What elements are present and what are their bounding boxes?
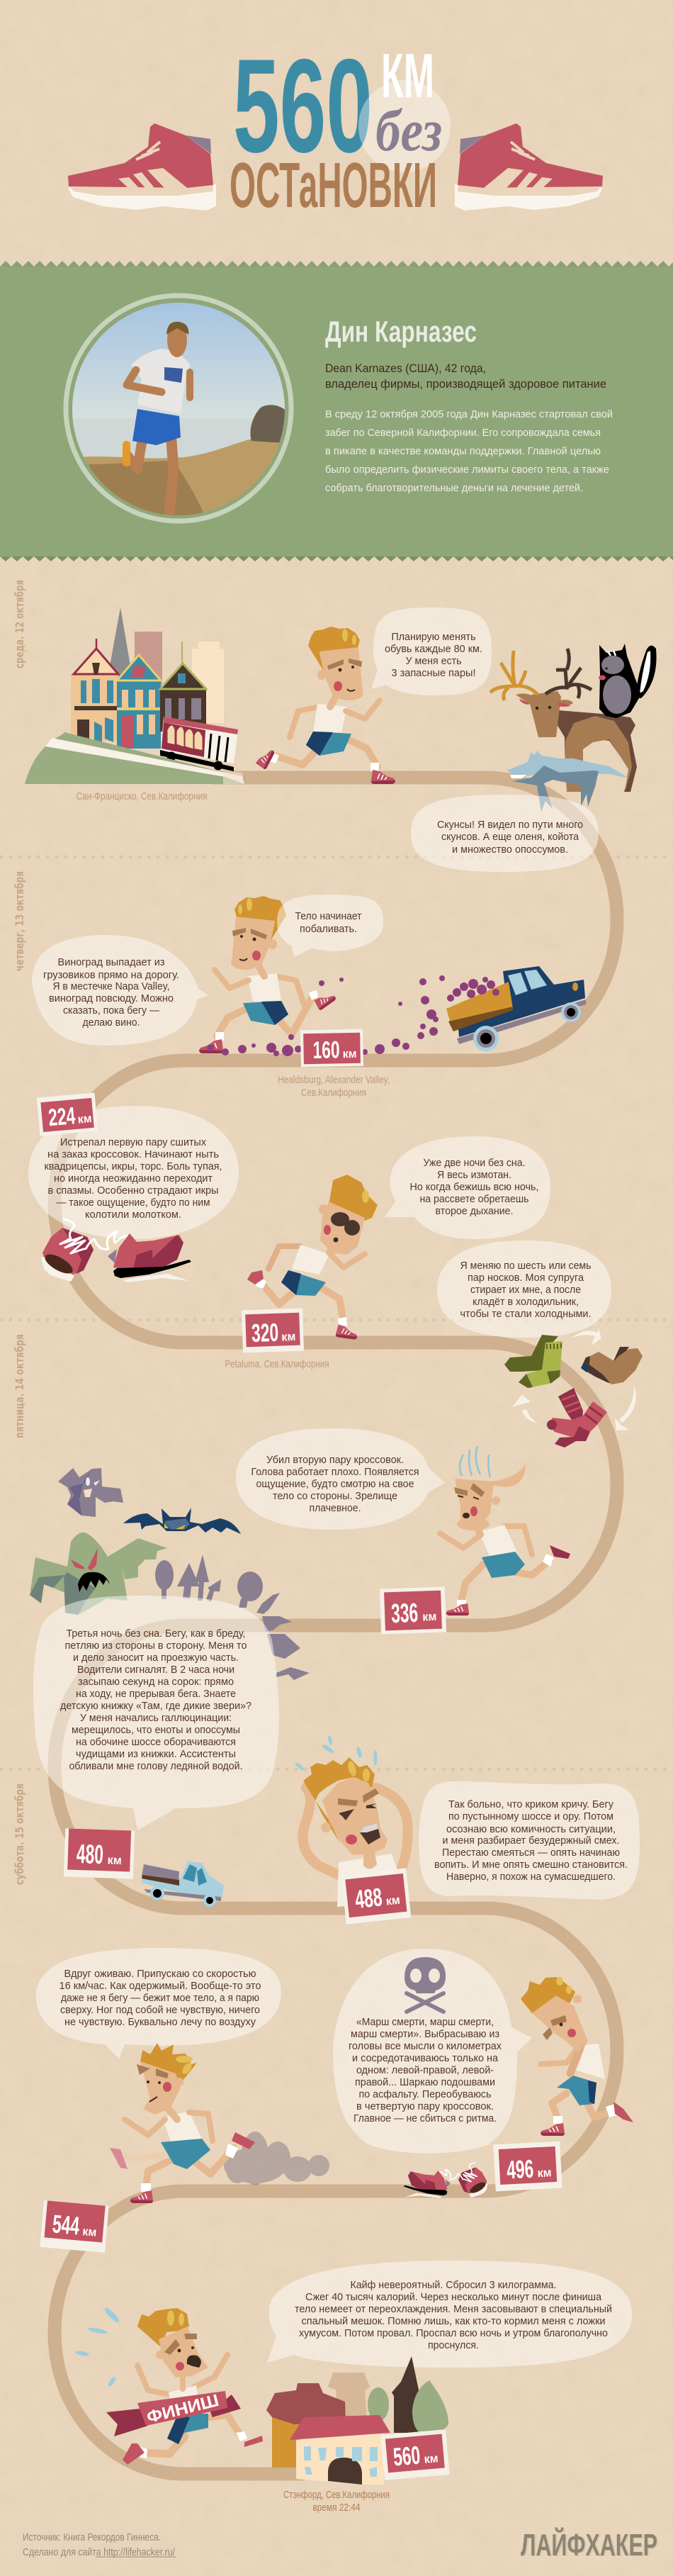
speech bubble: screaming: вопить. И мне опять смешно становится.: [434, 1859, 628, 1871]
steam: [460, 1446, 490, 1477]
portrait photo: [66, 296, 291, 521]
hill: [25, 732, 244, 784]
distance tag: 560 km: [380, 2429, 450, 2480]
illustration: San Francisco city: [25, 607, 244, 784]
distance tag: 488 km: [341, 1868, 411, 1925]
speech bubble: third night: чудищами из книжки. Ассистенты: [76, 1748, 236, 1760]
speech bubble: finish: проснулся.: [428, 2339, 479, 2351]
speech bubble: second pair: плачевное.: [309, 1502, 361, 1514]
icon: brown boot: [581, 1347, 643, 1384]
speech bubble: coming alive: [36, 1948, 281, 2059]
icon: white arrows: [512, 1329, 636, 1430]
distance tag: 160 km: 160: [312, 1036, 340, 1064]
house 2: [117, 655, 161, 749]
runner 2: [199, 896, 336, 1053]
scattered grapes: [207, 975, 445, 1056]
bio paragraph: собрать благотворительные деньги на лечение детей.: [325, 482, 583, 494]
speech bubble: coming alive: не чувствую. Буквально лечу по воздуху: [64, 2016, 256, 2028]
speech bubble: second pair: Голова работает плохо. Появляется: [251, 1466, 419, 1478]
speech bubble: skunks: Скунсы! Я видел по пути много: [437, 819, 583, 831]
speech bubble: first pair worn: в спазмы. Особенно страдают икры: [48, 1185, 218, 1197]
house 1: [71, 639, 118, 742]
speech bubble: two nights: второе дыхание.: [435, 1205, 513, 1217]
speech bubble: death march: Главное — не сбиться с ритма.: [354, 2112, 497, 2124]
dust cloud: [224, 2132, 329, 2185]
speech bubble: socks: пар носков. Моя супруга: [468, 1272, 584, 1284]
head with open scalp: [454, 1464, 526, 1530]
highlight circle: [358, 80, 451, 172]
speech bubble: coming alive: Вдруг оживаю. Припускаю со скоростью: [64, 1968, 256, 1980]
sweat drops: [294, 1735, 377, 1771]
distance tag: 488 km: км: [385, 1893, 401, 1908]
runner in photo: [123, 322, 190, 512]
speech bubble: socks: стирает их мне, а после: [470, 1284, 581, 1296]
distance tag: 496 km: км: [537, 2166, 552, 2180]
speech bubble: third night: [33, 1596, 279, 1830]
speech bubble: third night: обливали мне голову ледяной водой.: [69, 1760, 242, 1772]
date label: Friday: пятница. 14 октября: [13, 1334, 26, 1438]
speech bubble: screaming: осознаю всю комичность ситуации,: [446, 1823, 616, 1835]
speech bubble: shoes plan: 3 запасные пары!: [391, 667, 476, 679]
bio paragraph: [325, 408, 613, 494]
speech bubble: third night: детскую книжку «Там, где дикие звери»?: [60, 1700, 251, 1712]
speech bubble: screaming: Наверно, я похож на сумасшедшего.: [446, 1871, 616, 1883]
speech bubble: skunks: [411, 795, 599, 872]
distance tag: 488 km: 488: [354, 1882, 383, 1914]
speech bubble: two nights: Но когда бежишь всю ночь,: [409, 1181, 538, 1193]
icon: green ghost: [30, 1533, 167, 1615]
label: Healdsburg: Healdsburg, Alexander Valley,: [278, 1074, 390, 1086]
speech bubble: coming alive: даже не я бегу — бежит мое тело, а я парю: [61, 1992, 259, 2004]
speech bubble: socks: Я меняю по шесть или семь: [460, 1260, 592, 1272]
runner 3: [247, 1175, 378, 1340]
speech bubble: third night: мерещилось, что еноты и опоссумы: [72, 1724, 240, 1736]
speech bubble: coming alive: 16 км/час. Как одержимый. Вообще-то это: [60, 1980, 261, 1992]
house 3: [160, 642, 206, 732]
speech bubble: death march: «Марш смерти, марш смерти,: [356, 2016, 494, 2028]
speech bubble: shoes plan: У меня есть: [405, 655, 462, 667]
speech bubble: third night: Третья ночь без сна. Бегу, как в бреду,: [67, 1628, 245, 1640]
bio subtitle: владелец фирмы, производящей здоровое питание: [325, 377, 606, 391]
icon: right sneaker: [455, 123, 603, 211]
speech bubble: skunks: и множество опоссумов.: [452, 844, 568, 856]
speech bubble: finish: хумусом. Потом провал. Проспал всю ночь и утром благополучно: [299, 2327, 608, 2339]
speech bubble: socks: чтобы те стали холодными.: [460, 1308, 591, 1320]
runner 5 screaming: [294, 1735, 408, 1907]
icon: bat: [123, 1508, 241, 1534]
speech bubble: first pair worn: но иногда неожиданно переходит: [54, 1172, 213, 1185]
speech bubble: third night: на ходу, не прерывая бега. Знаете: [76, 1688, 236, 1700]
cargo grapes: [447, 977, 499, 1002]
title KM: КМ: [381, 40, 434, 111]
bio paragraph: было определить физические лимиты своего тела, а также: [325, 464, 609, 476]
bio subtitle: [325, 362, 606, 391]
speech bubble: grapes: Виноград выпадает из: [58, 956, 165, 968]
distance tag: 320 km: [242, 1309, 304, 1353]
speech bubble: death march: правой... Шаркаю подошвами: [355, 2076, 495, 2088]
distance tag: 336 km: км: [422, 1610, 437, 1624]
date label: Wednesday: среда. 12 октября: [13, 580, 26, 668]
speech bubble: third night: петляю из стороны в сторону. Меня то: [65, 1640, 247, 1652]
speech bubble: finish: [267, 2261, 632, 2368]
label: San Francisco: Сан-Франциско, Сев.Калифорния: [77, 790, 207, 802]
date separators: [1, 857, 673, 1769]
speech bubble: second pair: Убил вторую пару кроссовок.: [266, 1454, 404, 1466]
speech bubble: death march: по асфальту. Переобуваюсь: [358, 2088, 492, 2100]
speech bubble: two nights: [385, 1136, 550, 1239]
illustration: pickup: [142, 1861, 224, 1907]
speech bubble: second pair: [236, 1428, 445, 1530]
speech bubble: finish: Кайф невероятный. Сбросил 3 килограмма.: [350, 2279, 557, 2291]
speech bubble: grapes: грузовиков прямо на дорогу.: [43, 969, 179, 981]
distance tag: 160 km: [300, 1029, 363, 1067]
speech bubble: first pair worn: Истрепал первую пару сшитых: [60, 1136, 206, 1148]
speech bubble: grapes: сказать, пока бегу —: [63, 1004, 159, 1017]
distance tag: 496 km: [493, 2141, 562, 2191]
speech bubble: screaming: и меня разбирает безудержный смех.: [442, 1835, 619, 1847]
finish ribbon: [106, 2391, 241, 2436]
speech bubble: death march: марш смерти». Выбрасываю из: [351, 2028, 499, 2040]
speech bubble: death march: и сосредотачиваюсь только на: [352, 2052, 499, 2064]
distance tag: 320 km: 320: [251, 1318, 279, 1348]
speech bubble: shoes plan: обувь каждые 80 км.: [385, 643, 482, 655]
illustration: coyote: [507, 751, 629, 812]
runner 1: [255, 627, 395, 784]
speech bubble: third night: и дело заносит на проезжую часть.: [73, 1652, 239, 1664]
speech bubble: skunks: скунсов. А еще оленя, койота: [441, 831, 579, 843]
speech bubble: two nights: Уже две ночи без сна.: [424, 1157, 526, 1169]
runner 6 tired: [521, 1977, 633, 2136]
illustration: deer: [490, 649, 637, 792]
icon: forest trees: [155, 1555, 310, 1680]
bio paragraph: забег по Северной Калифорнии. Его сопровождала семья: [325, 427, 601, 439]
title stops: ОСТаНОВКИ: [230, 150, 437, 221]
illustration: truck: [446, 966, 586, 1051]
speech bubble: grapes: [32, 935, 208, 1046]
speech bubble: death march: [333, 1949, 532, 2154]
icon: red socks: [547, 1388, 607, 1447]
title number 560: 560: [233, 31, 373, 180]
speech bubble: body aches: побаливать.: [300, 923, 357, 935]
bio paragraph: в пикапе в качестве команды поддержки. Главной целью: [325, 445, 601, 457]
date label: Saturday: суббота. 15 октября: [13, 1783, 26, 1885]
speech bubble: finish: тело немеет от переохлаждения. Меня засовывают в специальный: [295, 2303, 612, 2315]
label: Healdsburg: [278, 1074, 390, 1099]
illustration: skunk: [599, 644, 657, 718]
head spiky hair: [137, 2043, 197, 2115]
speech bubble: finish: спальный мешок. Помню лишь, как кто-то кормил меня с ложки: [302, 2315, 605, 2327]
speech bubble: first pair worn: квадрицепсы, икры, торс. Боль тупая,: [44, 1160, 222, 1172]
distance tag: 560 km: км: [424, 2451, 439, 2466]
distance tag: 224 km: [37, 1093, 98, 1136]
label: Stanford: Стэнфорд, Сев.Калифорния: [283, 2489, 390, 2501]
speech bubble: screaming: [419, 1781, 640, 1900]
speech bubble: two nights: Я весь измотан.: [437, 1169, 511, 1181]
sweat drops: [75, 2306, 121, 2387]
source credits: Сделано для сайта http://lifehacker.ru/: [23, 2546, 176, 2558]
screaming head: [303, 1757, 388, 1855]
label: Petaluma: Petaluma, Сев.Калифорния: [225, 1358, 329, 1370]
speech bubble: finish: Сжег 40 тысяч калорий. Через несколько минут после финиша: [305, 2291, 602, 2303]
speech bubble: first pair worn: колотили молотком.: [85, 1209, 181, 1221]
icon: purple monster: [58, 1468, 123, 1517]
distance tag: 480 km: км: [107, 1853, 122, 1867]
distance tag: 224 km: 224: [47, 1102, 77, 1131]
distance tag: 336 km: [380, 1586, 446, 1635]
speech bubble: second pair: ощущение, будто смотрю на свое: [256, 1478, 414, 1490]
illustration: Stanford buildings: [266, 2356, 448, 2485]
distance tag: 496 km: 496: [506, 2154, 534, 2185]
speech bubble: first pair worn: на заказ кроссовок. Начинают ныть: [47, 1148, 219, 1160]
runner 4: [440, 1446, 570, 1615]
speech bubble: shoes plan: [371, 607, 492, 695]
distance tag: 544 km: [40, 2200, 109, 2253]
speech bubble: body aches: [277, 895, 383, 957]
speech bubble: third night: на обочине шоссе оборачиваются: [76, 1736, 236, 1748]
label: Healdsburg: Сев.Калифорния: [301, 1087, 366, 1099]
speech bubble: third night: засыпаю секунд на сорок: прямо: [78, 1676, 234, 1688]
speech bubble: socks: кладёт в холодильник,: [473, 1296, 579, 1308]
head bowed: [521, 1977, 588, 2052]
speech bubble: grapes: делаю вино.: [82, 1017, 140, 1029]
title: [230, 31, 451, 221]
speech bubble: screaming: по пустынному шоссе и ору. Потом: [448, 1810, 613, 1822]
icon: left sneaker: [68, 123, 216, 211]
speech bubble: grapes: виноград повсюду. Можно: [49, 992, 174, 1004]
speech bubble: death march: головы все мысли о километрах: [349, 2040, 502, 2052]
runner 7 flying: [110, 2043, 329, 2203]
panel: biography: [0, 261, 673, 562]
speech bubble: death march: в четвертую пару кроссовок.: [356, 2100, 494, 2112]
speech bubble: third night: Водители сигналят. В 2 часа ночи: [77, 1664, 234, 1676]
speech bubble: death march: одном: левой-правой, левой-: [356, 2064, 494, 2076]
bio name: Дин Карназес: [325, 315, 477, 348]
speech bubble: shoes plan: Планирую менять: [391, 631, 476, 643]
speech bubble: third night: У меня начались галлюцинации:: [80, 1712, 232, 1724]
label: Stanford: [283, 2489, 390, 2514]
bio paragraph: В среду 12 октября 2005 года Дин Карназес стартовал свой: [325, 408, 613, 420]
icon: sneakers at 496: [404, 2163, 488, 2198]
distance tag: 160 km: км: [342, 1047, 357, 1060]
distance tag: 480 km: 480: [76, 1839, 104, 1870]
icon: worn-out sneakers: [41, 1219, 191, 1282]
cable car: [160, 717, 238, 771]
distance tag: 544 km: км: [82, 2224, 97, 2239]
speech bubble: socks: [437, 1241, 611, 1338]
speech bubble: first pair worn: — такое ощущение, будто по ним: [57, 1197, 210, 1209]
distance tag: 560 km: 560: [392, 2440, 422, 2472]
title without: без: [375, 98, 442, 164]
distance tag: 320 km: км: [281, 1330, 296, 1344]
route road: [55, 778, 617, 2474]
distance tag: 480 km: [64, 1828, 135, 1879]
speech bubble: coming alive: сверху. Ног под собой не чувствую, ничего: [60, 2004, 260, 2016]
head with sunglasses: [319, 1175, 378, 1255]
speech bubble: second pair: тело со стороны. Зрелище: [273, 1490, 397, 1502]
distance tag: 224 km: км: [77, 1111, 92, 1126]
icon: skull: [405, 1957, 446, 2012]
speech bubble: grapes: Я в местечке Napa Valley,: [52, 980, 170, 992]
label: Stanford: время 22:44: [313, 2502, 360, 2514]
speech bubble: two nights: на рассвете обретаешь: [419, 1193, 529, 1205]
date label: Thursday: четверг, 13 октября: [13, 871, 26, 971]
source credits: [23, 2531, 176, 2558]
runner 8 finish: [75, 2306, 263, 2465]
speech bubble: screaming: Перестаю смеяться — опять начинаю: [442, 1847, 620, 1859]
speech bubble: first pair worn: [28, 1106, 239, 1239]
finish ribbon: ФИНИШ: [145, 2391, 221, 2427]
distance tag: 544 km: 544: [51, 2209, 81, 2241]
source credits: Источник: Книга Рекордов Гиннеса.: [23, 2531, 161, 2543]
speech bubble: screaming: Так больно, что криком кричу. Бегу: [448, 1798, 613, 1810]
head shouting: [137, 2308, 208, 2378]
speech bubble: body aches: Тело начинает: [295, 910, 362, 922]
distance tag: 336 km: 336: [390, 1598, 419, 1629]
icon: green socks: [504, 1335, 562, 1388]
bio subtitle: Dean Karnazes (США), 42 года,: [325, 362, 486, 375]
